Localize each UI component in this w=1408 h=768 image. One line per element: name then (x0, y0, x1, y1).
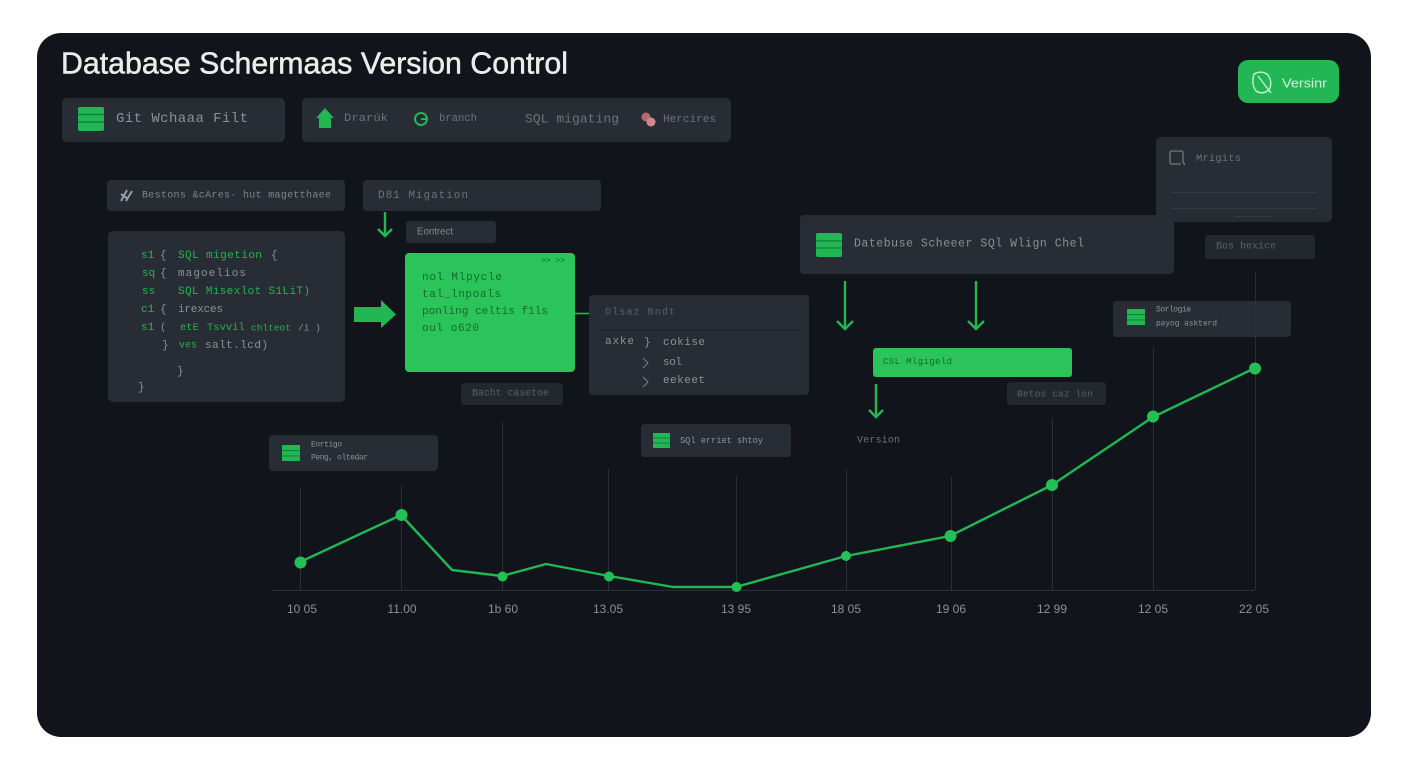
title: Database Schermaas Version Control (61, 46, 568, 80)
chart axis labels (287, 602, 1269, 616)
list row 1 (605, 336, 705, 349)
list row 2 (643, 357, 682, 369)
branch label: branch (439, 113, 477, 125)
code line 2: sq (142, 268, 155, 280)
icon: pills (642, 112, 656, 126)
chart line (300, 368, 1255, 587)
panel: green migration card (405, 253, 575, 372)
card text line 2: tal_lnpoals (422, 289, 501, 301)
arrow: code to migration (354, 300, 396, 328)
chart axis labels: 12 99 (1037, 602, 1067, 616)
label: betos (1007, 382, 1106, 405)
chart axis labels: 1b 60 (488, 602, 518, 616)
icon: version tag (1253, 72, 1271, 93)
panel: database schema header (800, 215, 1174, 274)
card corner marks: >> >> (541, 256, 565, 266)
code line 4: { (160, 304, 167, 316)
panel: storage (1113, 301, 1291, 337)
code line 1: { (160, 250, 167, 262)
closing brace inner: } (177, 366, 184, 378)
icon: search box (1170, 151, 1185, 165)
label: batch: Bacht casetoe (472, 388, 549, 400)
line chart (272, 272, 1269, 616)
header text: Datebuse Scheeer SQl Wlign Chel (854, 238, 1084, 250)
arrow: down left (837, 281, 853, 329)
chart axis labels: 12 05 (1138, 602, 1168, 616)
icon: home (316, 108, 334, 128)
code line 3: ss (142, 286, 155, 298)
code line 2: { (160, 268, 167, 280)
label: content: Eontrect (417, 226, 453, 238)
storage title: Sorlogie (1156, 306, 1191, 314)
panel: git schema file (62, 98, 285, 142)
chart axis labels: 13.05 (593, 602, 623, 616)
entries subtitle: Peng, oltedar (311, 454, 368, 462)
panel: entries (269, 435, 438, 471)
label: batch (461, 383, 563, 405)
arrow: down to version (869, 384, 883, 417)
chart axis labels: 22 05 (1239, 602, 1269, 616)
trunk label: Drarúk (344, 113, 388, 125)
card text line 3: ponling celtis f1ls (422, 306, 548, 318)
code line 1: { (271, 250, 278, 262)
icon: branch (415, 113, 427, 125)
chart axis labels: 19 06 (936, 602, 966, 616)
chart axis labels: 10 05 (287, 602, 317, 616)
code line 4: c1 (141, 304, 155, 316)
panel: green sql migration bar: CSL Mlgigeld (883, 357, 952, 367)
card text line 4: oul o620 (422, 323, 479, 335)
icon: schema stack (653, 433, 670, 448)
code line 6: } (162, 340, 169, 352)
list row 2: sol (663, 357, 682, 369)
chart axis labels: 11.00 (387, 602, 417, 616)
panel: sessions header (107, 180, 345, 211)
list heading: Dlsaz Bndt (605, 306, 675, 318)
code line 5: /i ) (298, 322, 321, 334)
card text line 1: nol Mlpycle (422, 272, 502, 284)
list row 3: eekeet (663, 375, 705, 387)
code line 2 (142, 268, 246, 280)
panel: code block (108, 231, 345, 402)
list row 1: axke (605, 336, 634, 348)
version badge (1238, 60, 1339, 103)
panel: list (589, 295, 809, 395)
code line 3: SQL Misexlot S1LiT) (178, 286, 310, 298)
code line 5 (141, 322, 321, 334)
panel: toolbar (302, 98, 731, 142)
chart points (294, 362, 1261, 592)
sessions text: Bestons &cAres· hut magetthaee (142, 190, 331, 202)
list row 1: cokise (663, 337, 705, 349)
entry text: SQl erriet shtoy (680, 436, 763, 446)
merges label: Hercires (663, 114, 716, 126)
label: betos: Betos caz lon (1017, 388, 1093, 400)
panel: db migration header (363, 180, 601, 211)
code line 5: s1 (141, 322, 155, 334)
panel: sql entry (641, 424, 791, 457)
code line 5: etE (180, 322, 199, 334)
chart axis labels: 13 95 (721, 602, 751, 616)
code line 1: SQL migetion (178, 250, 262, 262)
code line 6 (162, 340, 268, 352)
storage subtitle: payog askterd (1156, 320, 1217, 328)
panel: green sql migration bar (873, 348, 1072, 377)
closing brace outer: } (138, 382, 145, 394)
code line 5: ( (160, 322, 166, 334)
sql migration label: SQL migating (525, 112, 619, 126)
list row 1: } (644, 337, 651, 349)
file label: Git Wchaaa Filt (116, 111, 248, 127)
badge label: Versinr (1282, 76, 1328, 90)
migrations label: Mrigits (1196, 153, 1241, 165)
icon: schema stack (1127, 309, 1145, 325)
entries title: Eortigo (311, 440, 342, 450)
code line 1: s1 (141, 250, 155, 262)
code line 5: chlteot (251, 322, 291, 334)
connector: card to list (575, 312, 590, 314)
label: base service: Bos bexice (1216, 240, 1276, 252)
version label: Version (857, 434, 900, 446)
code line 1 (141, 250, 278, 262)
code line 4: irexces (178, 304, 223, 316)
icon: tools (121, 190, 132, 201)
label: base service (1205, 235, 1315, 259)
chart axis labels: 18 05 (831, 602, 861, 616)
icon: schema stack (282, 445, 300, 461)
code line 6: ves (179, 340, 197, 352)
arrow: down right (968, 281, 984, 329)
code line 4 (141, 304, 223, 316)
label: content (406, 221, 496, 243)
icon: schema stack (78, 107, 104, 131)
code line 6: salt.lcd) (205, 340, 268, 352)
arrow: down to content (378, 212, 392, 236)
header text: D81 Migation (378, 190, 468, 202)
code line 5: Tsvvil (207, 322, 245, 334)
list row 3 (643, 375, 705, 387)
chart grid (272, 272, 1256, 590)
icon: schema stack (816, 233, 842, 257)
code line 2: magoelios (178, 268, 246, 280)
panel: migrations (1156, 137, 1332, 222)
